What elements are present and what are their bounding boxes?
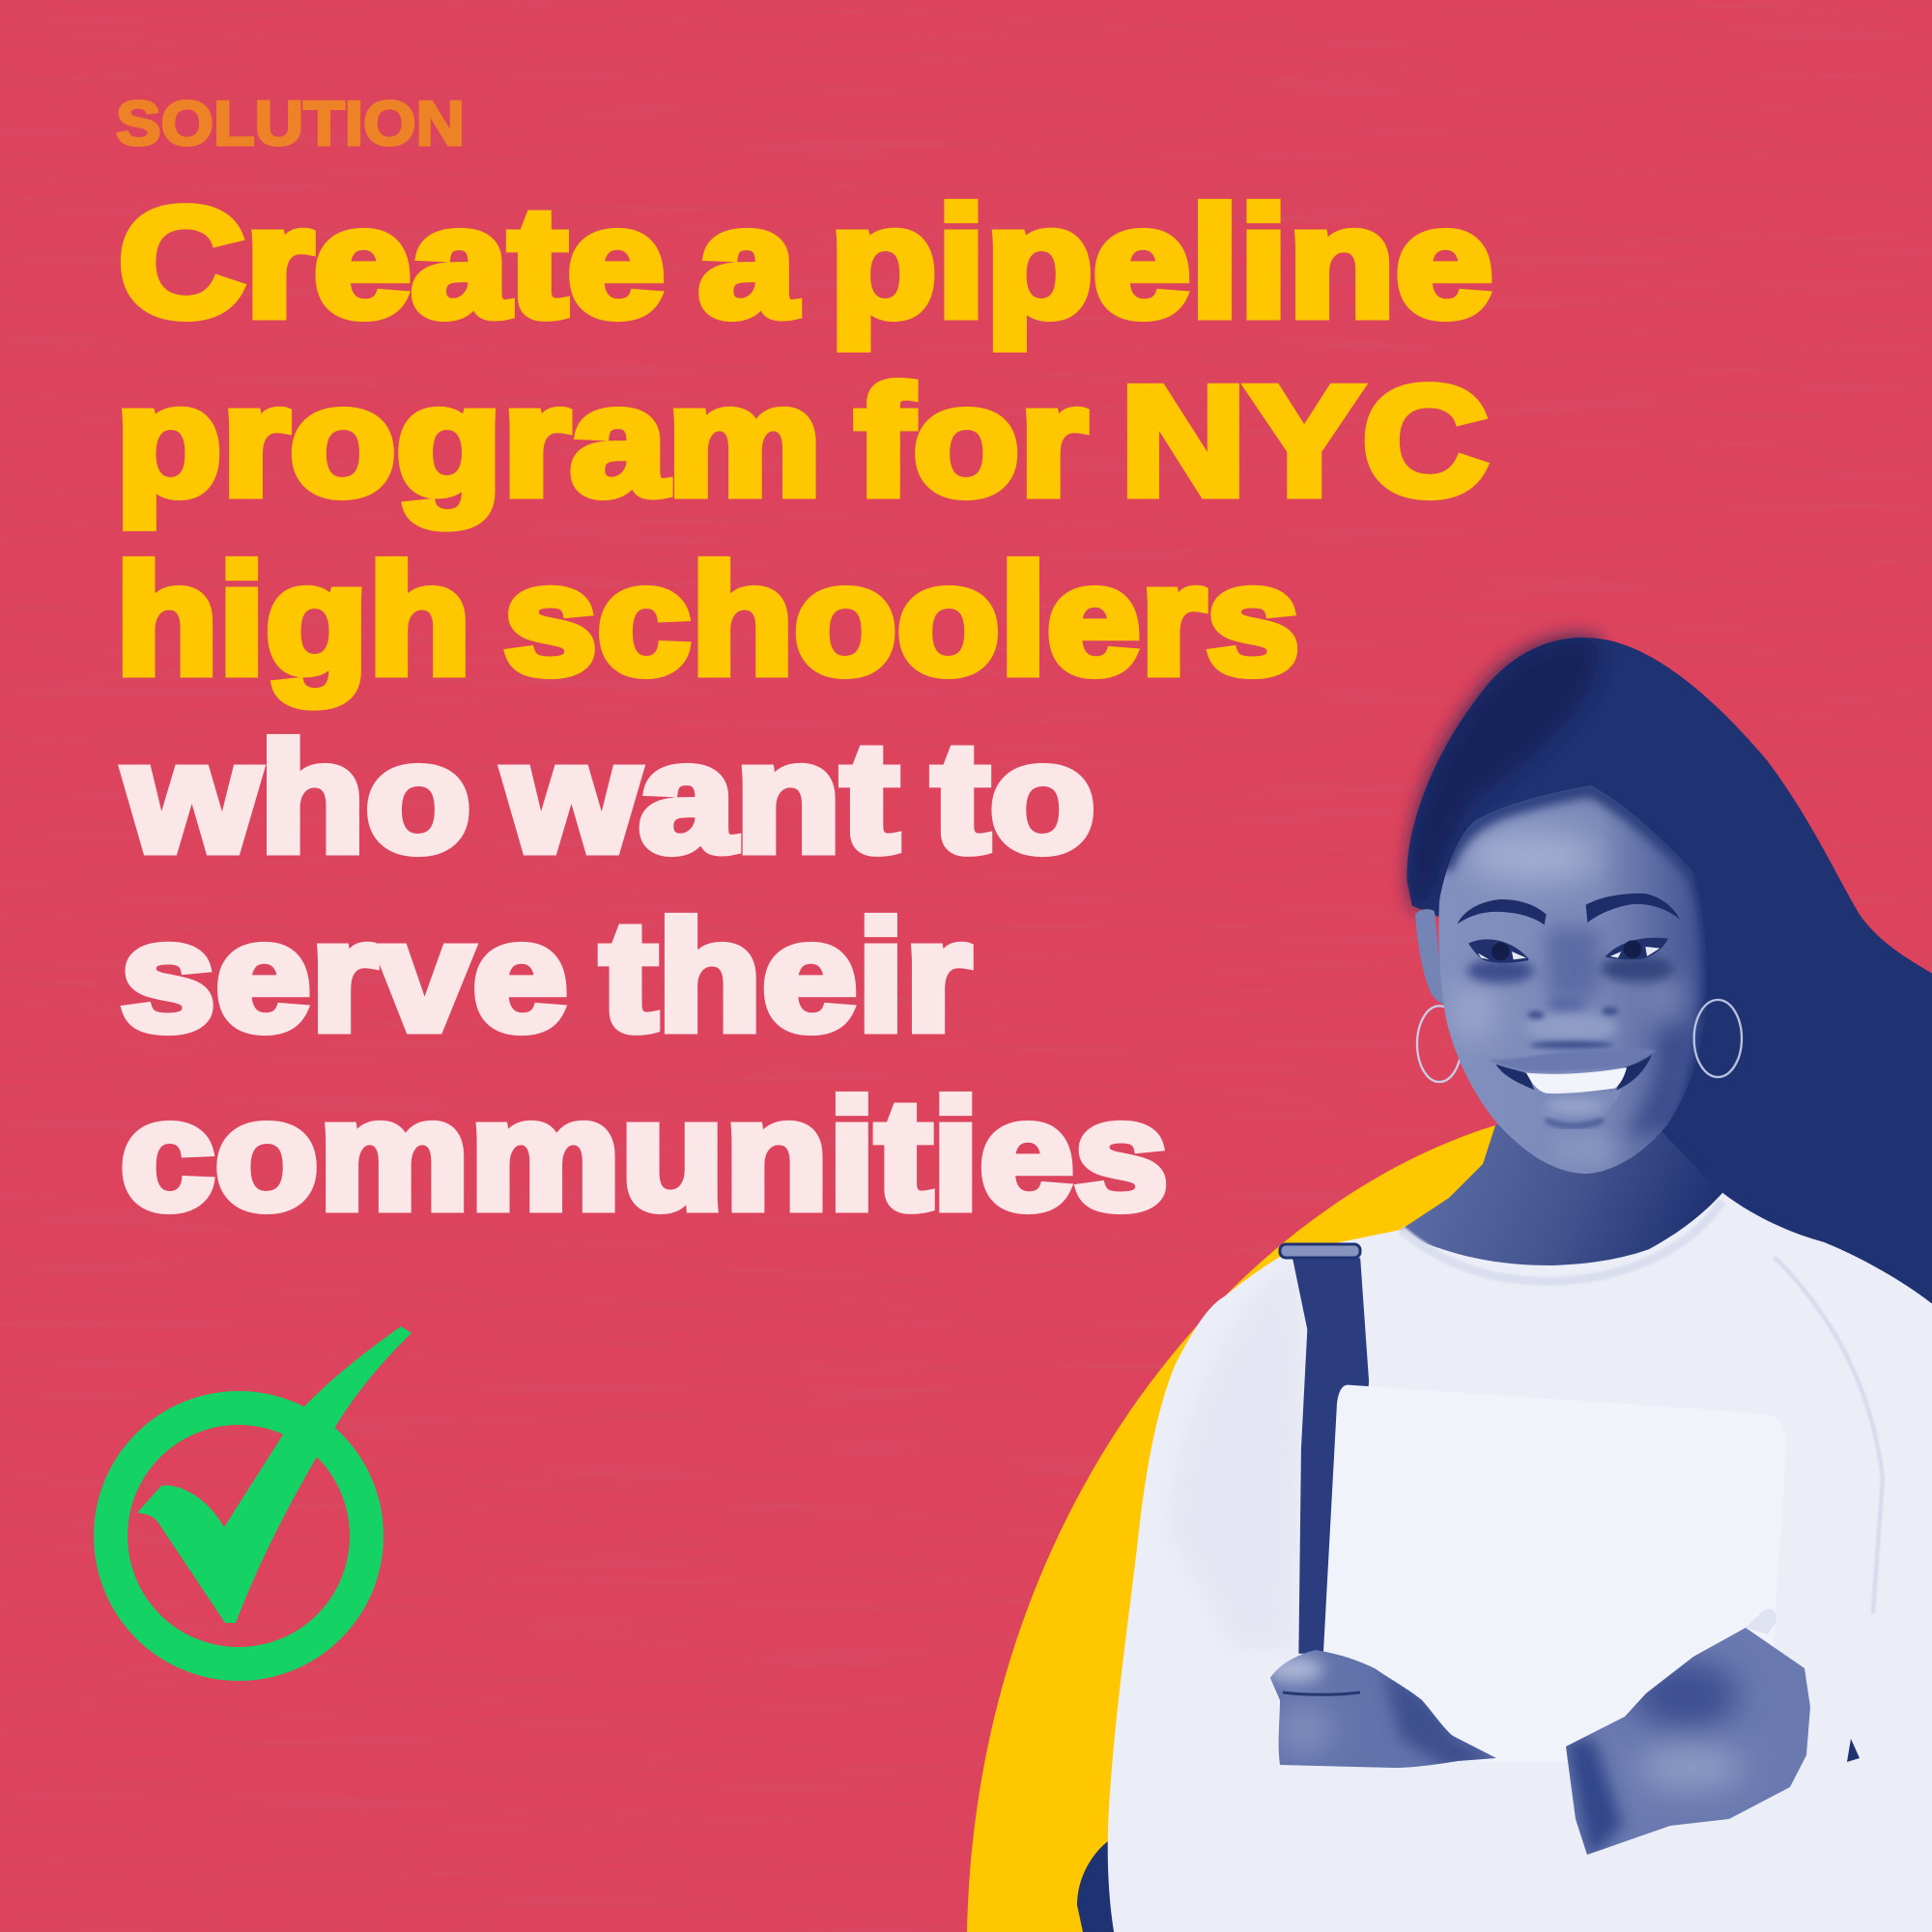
backpack lower xyxy=(1077,1841,1134,1932)
eyebrow right xyxy=(1586,894,1680,923)
earring left xyxy=(1417,1006,1462,1082)
mouth xyxy=(1488,1049,1657,1126)
eye left xyxy=(1468,939,1529,963)
laptop xyxy=(1323,1385,1786,1762)
eye right xyxy=(1605,938,1668,959)
headline xyxy=(116,176,1493,1242)
hand left xyxy=(1265,1650,1497,1773)
face group xyxy=(1415,785,1742,1174)
yellow arc xyxy=(967,1125,1602,1932)
label: SOLUTION: SOLUTION xyxy=(116,88,465,158)
headline line 3: high schoolers xyxy=(116,533,1300,707)
illustration: student with laptop xyxy=(967,638,1932,1932)
face shape xyxy=(1438,785,1707,1174)
nose bridge shade xyxy=(1546,927,1601,998)
headline line 5: serve their xyxy=(120,890,972,1064)
upper lip xyxy=(1488,1049,1657,1071)
hairline shadow xyxy=(1444,789,1693,872)
forearm and hand right xyxy=(1565,1609,1810,1860)
teeth xyxy=(1526,1067,1627,1094)
cheek highlights xyxy=(1451,982,1495,1040)
icon: green check in circle xyxy=(110,1326,412,1663)
hair xyxy=(1406,638,1932,1324)
ear xyxy=(1415,909,1444,1005)
headline line 1: Create a pipeline xyxy=(118,176,1493,350)
backpack strap xyxy=(1280,1244,1369,1654)
earring right xyxy=(1694,1000,1742,1077)
headline line 4: who want to xyxy=(124,711,1095,885)
headline line 6: communities xyxy=(120,1068,1169,1242)
forehead highlight xyxy=(1465,831,1601,882)
under-eye shade xyxy=(1466,958,1534,983)
smile corners and inner mouth xyxy=(1495,1055,1652,1090)
headline line 2: program for NYC xyxy=(116,355,1488,528)
sweater shading xyxy=(1164,1257,1306,1651)
nose xyxy=(1524,994,1618,1049)
chin highlight xyxy=(1565,1141,1609,1158)
eyebrow left xyxy=(1457,899,1547,924)
face right shadow xyxy=(1670,868,1707,1120)
small shadow right of hand xyxy=(1847,1739,1860,1762)
sweater xyxy=(1108,1193,1932,1932)
neck xyxy=(1391,1111,1739,1275)
thumb nail xyxy=(1746,1609,1776,1634)
lower lip xyxy=(1533,1090,1621,1123)
